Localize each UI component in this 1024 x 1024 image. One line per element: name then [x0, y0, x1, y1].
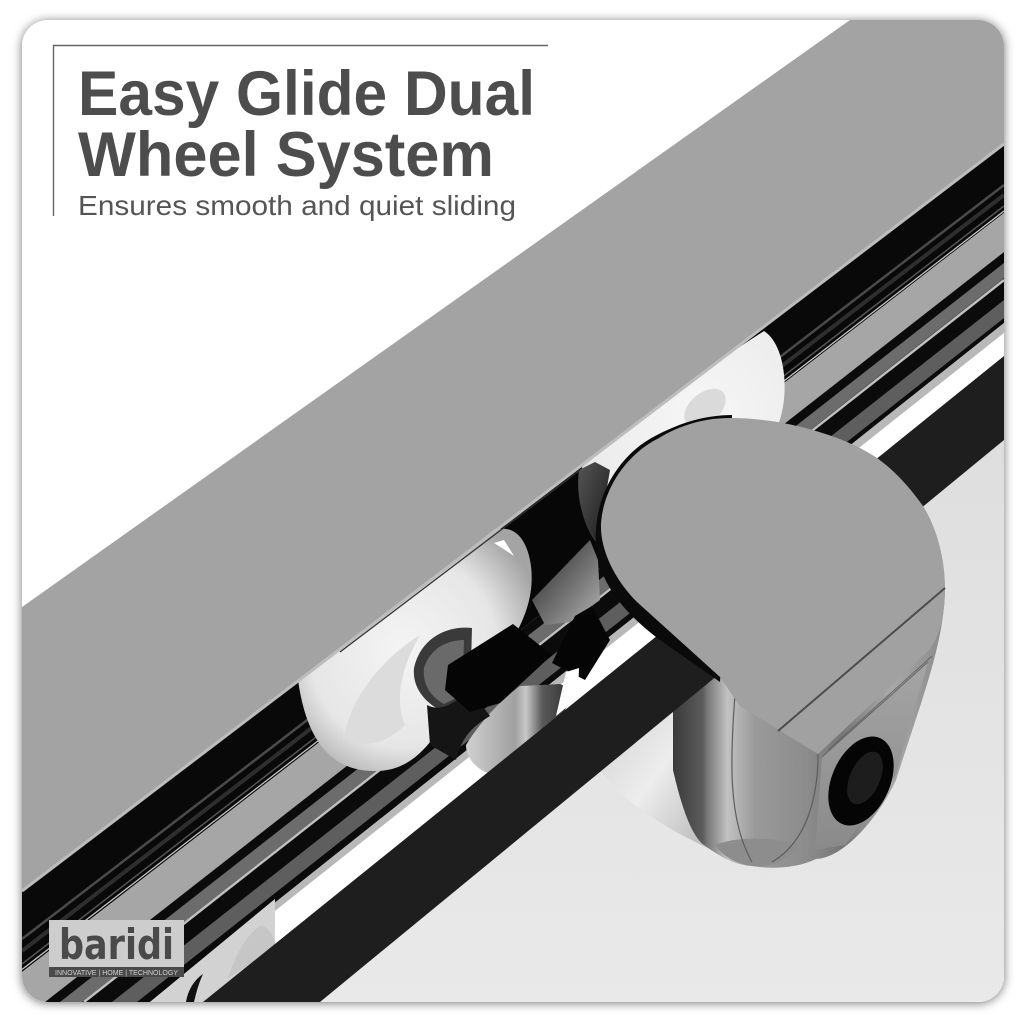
- chrome glint: [556, 668, 579, 716]
- cavity between the wheels: [518, 508, 610, 680]
- light lower rail strip: [150, 323, 1004, 1002]
- bracket screw hole: [828, 736, 894, 826]
- bracket end face: [815, 662, 928, 850]
- rear bracket body: [648, 750, 710, 849]
- floor / glass area: [320, 440, 1004, 1002]
- subtitle: Ensures smooth and quiet sliding: [78, 190, 516, 221]
- roller wheel: right: [578, 331, 785, 548]
- axle bolt: [414, 624, 552, 760]
- title: Wheel System: [78, 120, 494, 190]
- title: Easy Glide Dual: [78, 59, 535, 129]
- title: [78, 59, 535, 190]
- rail gray band: [22, 213, 1004, 1002]
- bracket dark shadow: [596, 415, 732, 682]
- bracket bottom tip: [716, 838, 772, 866]
- bracket body seam lines: [732, 695, 818, 862]
- logo: INNOVATIVE | HOME | TECHNOLOGY: [55, 970, 178, 977]
- end face seam: [822, 656, 932, 757]
- black door frame bar: [203, 356, 1004, 1002]
- white highlight strip: [275, 333, 1004, 944]
- title frame: [54, 46, 548, 216]
- bracket chrome body: [673, 585, 945, 868]
- cap groove line: [778, 588, 945, 731]
- chrome mounting plate: [466, 684, 566, 772]
- logo: baridi: [59, 920, 174, 969]
- bracket top cap: [601, 418, 945, 754]
- rail lower striped band: [45, 252, 1004, 1002]
- rail dark band with reflections: [22, 143, 1004, 972]
- lower wheel reflection at bottom: [150, 899, 275, 1002]
- roller wheel: left: [298, 529, 532, 771]
